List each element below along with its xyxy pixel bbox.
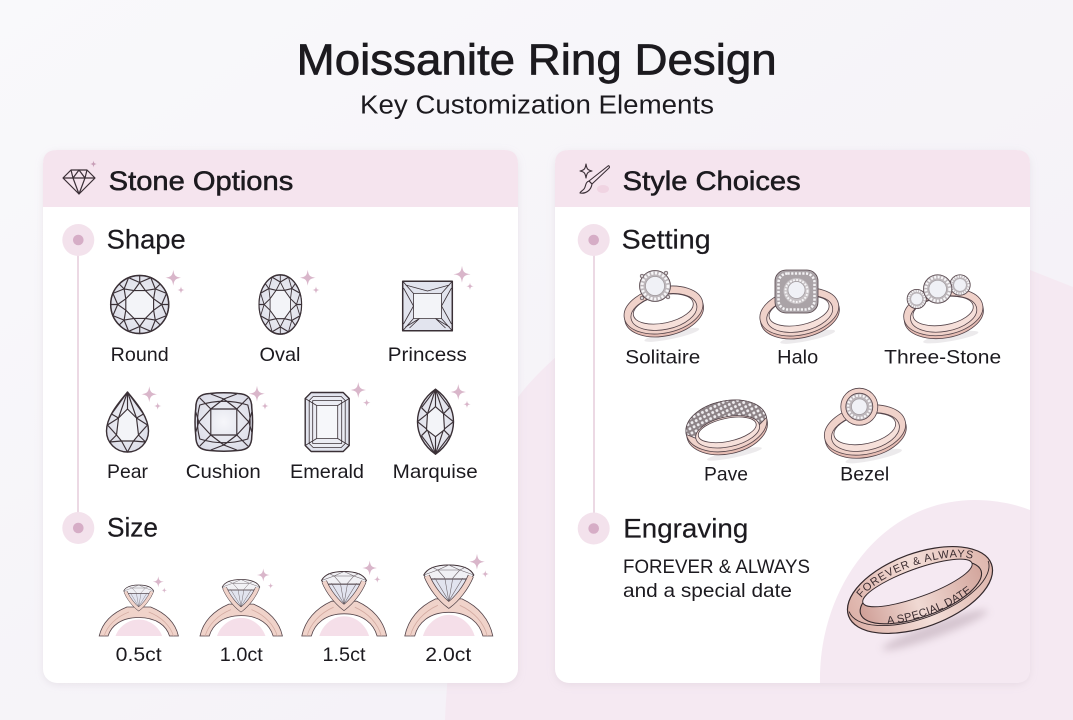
ring: three-stone [900, 275, 988, 348]
label: cushion: Cushion [186, 461, 261, 483]
gem: princess [403, 266, 474, 331]
section heading: engraving: Engraving [623, 514, 748, 544]
label: 2.0ct: 2.0ct [425, 644, 472, 666]
label: halo: Halo [777, 346, 818, 368]
timeline connector: stone options [77, 254, 79, 516]
section heading: size: Size [107, 513, 158, 543]
section heading: setting: Setting [622, 224, 711, 254]
panel: stone options [43, 150, 518, 683]
engraved text: a special date: A SPECIAL DATE [888, 586, 972, 624]
section marker: setting [578, 224, 610, 256]
sparkles: 1.0ct [257, 568, 274, 589]
gem: cushion [195, 386, 269, 451]
label: 1.0ct: 1.0ct [220, 644, 263, 666]
ring: halo [755, 270, 845, 350]
sparkles: round [165, 270, 185, 294]
sparkles: pear [141, 386, 162, 410]
engraving description: and a special date [623, 580, 792, 602]
subtitle: Key Customization Elements [360, 91, 714, 119]
sparkles: marquise [450, 384, 471, 408]
section marker: size [62, 512, 94, 544]
corner backdrop: engraving [820, 500, 1030, 683]
label: oval: Oval [260, 344, 300, 366]
ring: 2.0ct [405, 554, 493, 636]
engraved ring [846, 546, 994, 652]
label: 1.5ct: 1.5ct [322, 644, 366, 666]
panel: style choices [554, 150, 1030, 684]
ring: solitaire [620, 270, 709, 348]
timeline connector: style choices [593, 254, 595, 516]
sparkles: cushion [249, 386, 269, 410]
heading: stone options: Stone Options [109, 166, 293, 196]
panel header: style choices [555, 150, 1030, 207]
label: bezel: Bezel [840, 464, 889, 486]
label: princess: Princess [388, 344, 467, 366]
label: emerald: Emerald [290, 461, 364, 483]
ring: 0.5ct [99, 576, 178, 636]
gem: emerald [305, 382, 370, 452]
label: marquise: Marquise [393, 461, 478, 483]
heading: style choices: Style Choices [623, 166, 801, 196]
label: pave: Pave [704, 464, 748, 486]
label: pear: Pear [107, 461, 148, 483]
ring: bezel [820, 388, 912, 469]
label: three-stone: Three-Stone [884, 346, 1001, 368]
label: solitaire: Solitaire [625, 346, 700, 368]
engraving description [623, 556, 810, 602]
icon: brush and sparkle [580, 164, 609, 193]
ring: pave [681, 393, 773, 466]
label: 0.5ct: 0.5ct [116, 644, 162, 666]
icon: diamond [63, 160, 97, 194]
sparkles: princess [454, 266, 474, 290]
section marker: engraving [578, 512, 610, 544]
gem: marquise [418, 384, 471, 454]
section marker: shape [62, 224, 94, 256]
engraving description: FOREVER & ALWAYS [623, 556, 810, 578]
title: Moissanite Ring Design [297, 36, 777, 84]
label: round: Round [111, 344, 169, 366]
sparkles: oval [300, 270, 320, 294]
panel header: stone options [43, 150, 518, 207]
gem: round [111, 270, 185, 334]
sparkles: 1.5ct [362, 560, 381, 583]
engraved text: forever and always: FOREVER & ALWAYS [856, 550, 973, 598]
gem: oval [259, 270, 320, 334]
sparkles: 2.0ct [469, 554, 489, 578]
sparkles: emerald [350, 382, 370, 406]
sparkles: 0.5ct [153, 576, 167, 593]
section heading: shape: Shape [107, 224, 186, 254]
gem: pear [106, 386, 162, 452]
ring: 1.5ct [302, 560, 387, 636]
ring: 1.0ct [200, 568, 282, 636]
